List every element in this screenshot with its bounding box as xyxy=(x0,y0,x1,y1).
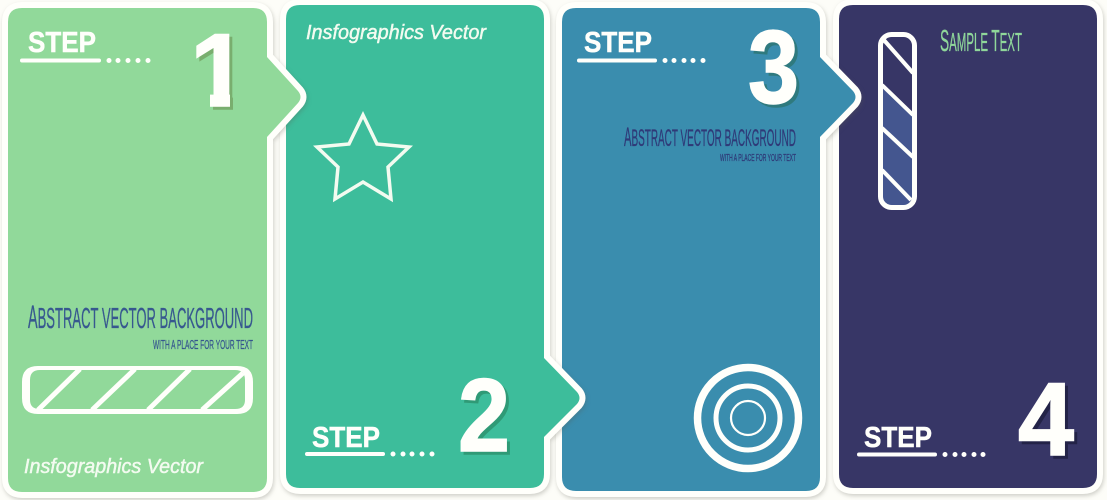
panel: step 1: ABSTRACT VECTOR BACKGROUND xyxy=(28,299,253,335)
panel: step 4 xyxy=(839,5,1097,488)
panel: step 2 xyxy=(286,5,580,488)
panel: step 1 xyxy=(8,8,300,492)
step label 2 xyxy=(307,422,432,454)
panel: step 3: ABSTRACT VECTOR BACKGROUND xyxy=(624,122,796,152)
panel: step 3 xyxy=(562,8,856,491)
icon: concentric circles xyxy=(698,368,798,468)
icon: vertical striped bar xyxy=(880,34,914,208)
step label 4 xyxy=(859,422,983,454)
step label 1 xyxy=(22,27,148,60)
number 3: 3 xyxy=(748,10,799,126)
caption: insfographics vector: Insfographics Vector xyxy=(306,22,487,44)
heading: sample text: SAMPLE TEXT xyxy=(940,23,1022,58)
number 4: 4 xyxy=(1018,362,1074,478)
subheading: with a place for your text: WITH A PLACE FOR YOUR TEXT xyxy=(153,337,253,352)
step label 3 xyxy=(579,27,703,60)
number 1: 1 xyxy=(190,13,248,129)
step label 2: STEP xyxy=(312,422,380,454)
icon: horizontal striped bar xyxy=(22,366,253,414)
number 2: 2 xyxy=(458,358,510,474)
icon: star xyxy=(317,115,409,199)
step label 3: STEP xyxy=(584,27,652,59)
step label 4: STEP xyxy=(864,422,932,454)
panel: step 3: WITH A PLACE FOR YOUR TEXT xyxy=(720,153,796,164)
step label 1: STEP xyxy=(28,27,96,59)
caption: insfographics vector: Insfographics Vector xyxy=(24,456,204,478)
